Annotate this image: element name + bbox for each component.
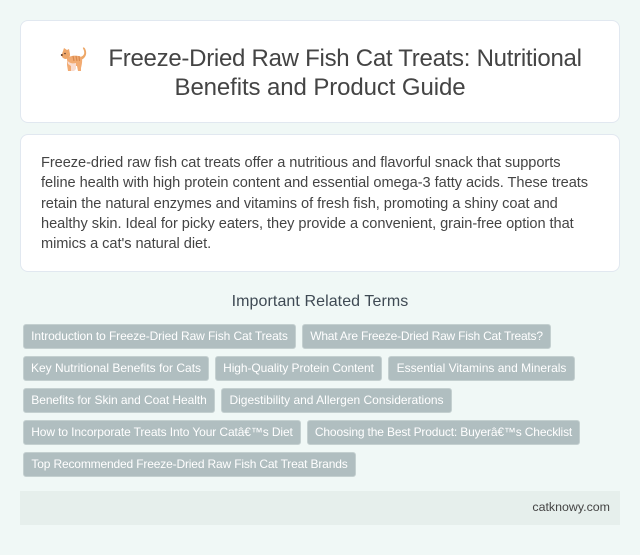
tag: Key Nutritional Benefits for Cats [31,361,201,375]
tag: How to Incorporate Treats Into Your Catâ€™s Diet [31,425,293,439]
text block: description: healthy skin. Ideal for picky eaters, they provide a convenient, grain-free option that [41,216,574,232]
text block: description [41,155,588,252]
icon: cat [60,47,86,71]
tag list [23,324,580,477]
tag [388,356,575,381]
tag: Choosing the Best Product: Buyerâ€™s Checklist [315,425,572,439]
tag [23,388,215,413]
tag [302,324,551,349]
text block: description: retain the natural enzymes and vitamins of fresh fish, promoting a shiny coat and [41,196,558,212]
tag [23,356,209,381]
tag [215,356,382,381]
footer: site name: catknowy.com [532,500,610,514]
tag [221,388,452,413]
footer bar [20,491,620,525]
text block: description: mimics a cat's natural diet. [41,236,211,252]
tag: Top Recommended Freeze-Dried Raw Fish Cat Treat Brands [31,457,348,471]
text block: description: Freeze-dried raw fish cat treats offer a nutritious and flavorful snack that supports [41,155,560,171]
tag: Introduction to Freeze-Dried Raw Fish Cat Treats [31,329,288,343]
tag: Essential Vitamins and Minerals [397,361,566,375]
heading: title line 2: Benefits and Product Guide [175,74,465,101]
tag [23,452,356,477]
tag [23,324,296,349]
text block: description: feline health with high protein content and essential omega-3 fatty acids. These treats [41,175,588,191]
panel: description card [20,134,620,272]
tag [307,420,580,445]
heading: related terms: Important Related Terms [232,293,408,310]
tag: High-Quality Protein Content [223,361,374,375]
heading: title line 1: Freeze-Dried Raw Fish Cat Treats: Nutritional [108,45,582,72]
tag: What Are Freeze-Dried Raw Fish Cat Treats? [310,329,543,343]
tag: Digestibility and Allergen Considerations [229,393,444,407]
tag [23,420,301,445]
tag: Benefits for Skin and Coat Health [31,393,207,407]
panel: title card [20,20,620,123]
